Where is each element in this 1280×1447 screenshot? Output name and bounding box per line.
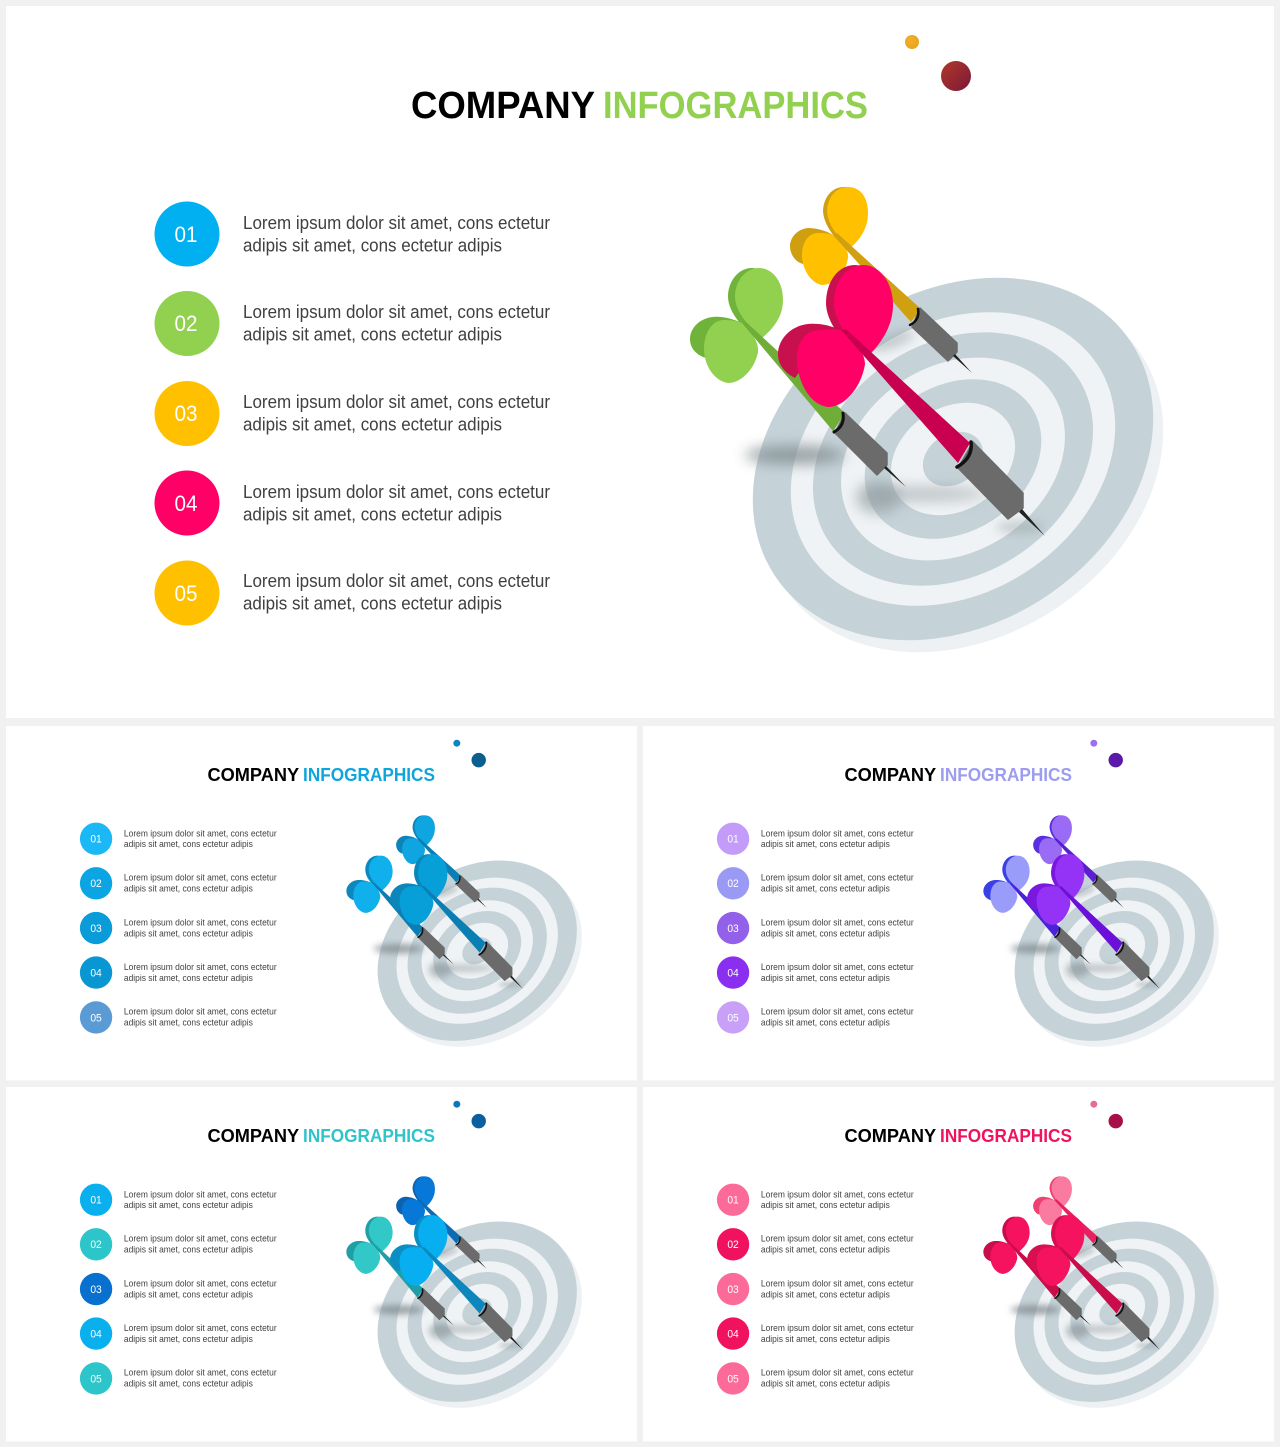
list item 02: adipis sit amet, cons ectetur adipis [761, 883, 890, 893]
list item 05: Lorem ipsum dolor sit amet, cons ectetur [124, 1367, 277, 1377]
list item 02 [80, 1228, 277, 1260]
list item 04 [717, 1317, 914, 1350]
list item 03: Lorem ipsum dolor sit amet, cons ectetur [761, 1278, 914, 1288]
list item 04: adipis sit amet, cons ectetur adipis [761, 1334, 890, 1344]
list item 03 [80, 912, 277, 944]
list item 02: 02 [90, 878, 102, 890]
list item 03: adipis sit amet, cons ectetur adipis [243, 414, 502, 434]
list item 02: adipis sit amet, cons ectetur adipis [761, 1244, 890, 1254]
list item 05: adipis sit amet, cons ectetur adipis [243, 594, 502, 614]
list item 01: 01 [90, 1195, 102, 1207]
list item 04: Lorem ipsum dolor sit amet, cons ectetur [243, 482, 550, 502]
list item 05: 05 [90, 1012, 102, 1024]
list item 01: adipis sit amet, cons ectetur adipis [243, 236, 502, 256]
list item 01: Lorem ipsum dolor sit amet, cons ectetur [761, 828, 914, 838]
list item 04: adipis sit amet, cons ectetur adipis [124, 973, 253, 983]
list item 01 [80, 1184, 277, 1216]
list item 03: 03 [90, 923, 102, 935]
title: COMPANY [208, 1126, 299, 1147]
list item 04: Lorem ipsum dolor sit amet, cons ectetur [761, 1323, 914, 1333]
list item 03: Lorem ipsum dolor sit amet, cons ectetur [124, 1278, 277, 1288]
list item 01: Lorem ipsum dolor sit amet, cons ectetur [761, 1189, 914, 1199]
panel: purple variant [643, 726, 1274, 1084]
list item 05: 05 [727, 1012, 739, 1024]
list item 03: adipis sit amet, cons ectetur adipis [124, 1289, 253, 1299]
list item 05: adipis sit amet, cons ectetur adipis [124, 1378, 253, 1388]
list item 01: adipis sit amet, cons ectetur adipis [761, 839, 890, 849]
list item 01: adipis sit amet, cons ectetur adipis [761, 1200, 890, 1210]
list item 02: adipis sit amet, cons ectetur adipis [243, 324, 502, 344]
list item 05: adipis sit amet, cons ectetur adipis [761, 1017, 890, 1027]
list item 05 [717, 1001, 914, 1034]
decorative dots [905, 35, 971, 91]
list item 05 [80, 1362, 277, 1395]
panel: blue variant [6, 726, 637, 1084]
list item 02: Lorem ipsum dolor sit amet, cons ectetur [761, 873, 914, 883]
illustration: target with three darts [980, 1176, 1253, 1445]
decorative dots [1090, 1101, 1123, 1128]
list item 05: adipis sit amet, cons ectetur adipis [124, 1017, 253, 1027]
list item 03: adipis sit amet, cons ectetur adipis [761, 1289, 890, 1299]
decorative dots [453, 1101, 486, 1128]
list item 04: 04 [727, 1329, 739, 1341]
list item 04: 04 [90, 1329, 102, 1341]
title: COMPANY [411, 85, 595, 127]
list item 01 [717, 823, 914, 855]
list item 04: Lorem ipsum dolor sit amet, cons ectetur [124, 962, 277, 972]
list item 03: Lorem ipsum dolor sit amet, cons ectetur [243, 392, 550, 412]
list item 02: 02 [90, 1239, 102, 1251]
list item 02: Lorem ipsum dolor sit amet, cons ectetur [243, 302, 550, 322]
illustration: target with three darts [343, 1176, 616, 1445]
title: INFOGRAPHICS [940, 765, 1072, 786]
list item 04: adipis sit amet, cons ectetur adipis [761, 973, 890, 983]
list item 01 [80, 823, 277, 855]
panel: pink variant [643, 1087, 1274, 1445]
decorative dots [453, 740, 486, 767]
title: INFOGRAPHICS [303, 765, 435, 786]
title: INFOGRAPHICS [603, 85, 868, 127]
title: COMPANY [208, 765, 299, 786]
list item 02: 02 [727, 878, 739, 890]
list item 05: Lorem ipsum dolor sit amet, cons ectetur [761, 1006, 914, 1016]
list item 05: Lorem ipsum dolor sit amet, cons ectetur [761, 1367, 914, 1377]
list item 03: 03 [727, 1284, 739, 1296]
title: INFOGRAPHICS [303, 1126, 435, 1147]
list item 04: 04 [90, 968, 102, 980]
list item 01: adipis sit amet, cons ectetur adipis [124, 839, 253, 849]
list item 01 [154, 202, 550, 266]
illustration: target with three darts [980, 815, 1253, 1084]
list item 02: 02 [727, 1239, 739, 1251]
list item 04: 04 [174, 491, 198, 516]
list item 03: Lorem ipsum dolor sit amet, cons ectetur [124, 917, 277, 927]
list item 01: 01 [90, 834, 102, 846]
list item 05 [154, 560, 550, 626]
title: COMPANY [845, 1126, 936, 1147]
list item 02: 02 [174, 311, 198, 336]
list item 04 [154, 470, 550, 536]
list item 01: Lorem ipsum dolor sit amet, cons ectetur [124, 1189, 277, 1199]
list item 02: Lorem ipsum dolor sit amet, cons ectetur [124, 1234, 277, 1244]
list item 05: 05 [174, 581, 198, 606]
list item 02 [154, 291, 550, 356]
list item 01: 01 [727, 1195, 739, 1207]
list item 01: Lorem ipsum dolor sit amet, cons ectetur [124, 828, 277, 838]
illustration: target with three darts [684, 187, 1232, 726]
list item 04: 04 [727, 968, 739, 980]
list item 02: adipis sit amet, cons ectetur adipis [124, 883, 253, 893]
list item 04: adipis sit amet, cons ectetur adipis [124, 1334, 253, 1344]
list item 05: Lorem ipsum dolor sit amet, cons ectetur [124, 1006, 277, 1016]
panel: main slide, green accent [6, 6, 1274, 726]
list item 05: Lorem ipsum dolor sit amet, cons ectetur [243, 571, 550, 591]
list item 02 [717, 1228, 914, 1260]
list item 02: Lorem ipsum dolor sit amet, cons ectetur [761, 1234, 914, 1244]
list item 04 [80, 956, 277, 989]
decorative dots [1090, 740, 1123, 767]
list item 02 [717, 867, 914, 899]
list item 05: 05 [727, 1373, 739, 1385]
list item 03: adipis sit amet, cons ectetur adipis [124, 928, 253, 938]
list item 01: Lorem ipsum dolor sit amet, cons ectetur [243, 213, 550, 233]
title: INFOGRAPHICS [940, 1126, 1072, 1147]
list item 02: Lorem ipsum dolor sit amet, cons ectetur [124, 873, 277, 883]
list item 02: adipis sit amet, cons ectetur adipis [124, 1244, 253, 1254]
list item 03: adipis sit amet, cons ectetur adipis [761, 928, 890, 938]
list item 04: adipis sit amet, cons ectetur adipis [243, 504, 502, 524]
list item 04: Lorem ipsum dolor sit amet, cons ectetur [761, 962, 914, 972]
panel: teal variant [6, 1087, 637, 1445]
list item 03: 03 [174, 401, 198, 426]
list item 01 [717, 1184, 914, 1216]
list item 03 [154, 381, 550, 446]
list item 01: 01 [174, 222, 198, 247]
list item 03: Lorem ipsum dolor sit amet, cons ectetur [761, 917, 914, 927]
list item 04: Lorem ipsum dolor sit amet, cons ectetur [124, 1323, 277, 1333]
list item 04 [80, 1317, 277, 1350]
illustration: target with three darts [343, 815, 616, 1084]
list item 04 [717, 956, 914, 989]
list item 01: adipis sit amet, cons ectetur adipis [124, 1200, 253, 1210]
list item 05 [80, 1001, 277, 1034]
list item 03: 03 [90, 1284, 102, 1296]
title: COMPANY [845, 765, 936, 786]
list item 05: adipis sit amet, cons ectetur adipis [761, 1378, 890, 1388]
list item 03 [717, 1273, 914, 1305]
list item 03 [80, 1273, 277, 1305]
list item 02 [80, 867, 277, 899]
list item 05: 05 [90, 1373, 102, 1385]
list item 01: 01 [727, 834, 739, 846]
list item 03 [717, 912, 914, 944]
list item 05 [717, 1362, 914, 1395]
list item 03: 03 [727, 923, 739, 935]
